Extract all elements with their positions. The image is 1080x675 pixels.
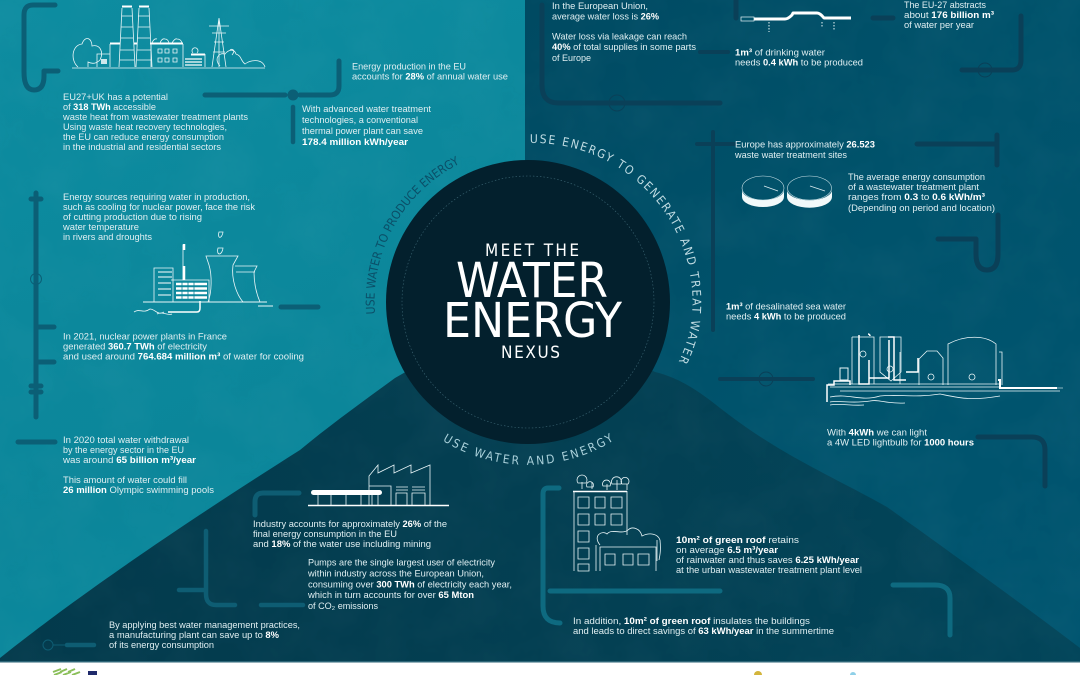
text: waste heat potential: EU27+UK has a potential — [63, 91, 168, 102]
text: green roof retention: on average 6.5 m³/year — [676, 544, 778, 555]
logo: right partners — [754, 671, 856, 675]
text: water loss: of Europe — [552, 52, 591, 63]
logo: left partner — [53, 669, 97, 675]
title — [443, 241, 623, 363]
text: treatment sites — [734, 138, 875, 160]
text: water withdrawal — [62, 434, 214, 495]
text: water withdrawal: This amount of water could fill — [63, 474, 187, 485]
text: thermal plant savings: 178.4 million kWh/year — [302, 136, 408, 147]
pipes: left panel — [18, 5, 339, 442]
text: thermal plant savings: technologies, a conventional — [302, 114, 418, 125]
text: energy production share: accounts for 28% of annual water use — [352, 70, 508, 82]
text: green roof retention: 10m² of green roof retains — [676, 534, 799, 545]
text: water loss: In the European Union, — [552, 0, 648, 11]
icon: desalination plant — [827, 334, 1063, 405]
text: green roof insulation: In addition, 10m² of green roof insulates the buildings — [573, 615, 810, 626]
curved label: use water and energy: USE WATER AND ENERGY — [444, 432, 612, 465]
text: thermal plant savings: With advanced water treatment — [302, 103, 431, 114]
text: drinking water — [735, 46, 863, 68]
text: treatment consumption: The average energy consumption — [848, 171, 985, 182]
icon: green roof building — [573, 475, 660, 571]
text: green roof insulation — [573, 615, 834, 636]
curved label: use water to produce energy: USE WATER TO PRODUCE ENERGY — [366, 156, 458, 314]
text: industry share: final energy consumption in the EU — [253, 528, 397, 539]
title: ENERGY — [443, 293, 623, 349]
text: nuclear in France: and used around 764.684 million m³ of water for cooling — [63, 350, 304, 362]
text: green roof retention — [676, 534, 862, 575]
text: LED comparison: With 4kWh we can light — [827, 426, 927, 438]
text: waste heat potential: in the industrial and residential sectors — [63, 141, 221, 152]
text: green roof retention: of rainwater and thus saves 6.25 kWh/year — [676, 554, 859, 565]
text: manufacturing savings: a manufacturing plant can save up to 8% — [109, 629, 280, 640]
text: water loss: 40% of total supplies in some parts — [552, 41, 696, 52]
text: pumps: consuming over 300 TWh of electricity each year, — [308, 578, 512, 590]
text: cooling risk: water temperature — [62, 221, 139, 232]
text: green roof retention: at the urban wastewater treatment plant level — [676, 564, 862, 575]
text: green roof insulation: and leads to direct savings of 63 kWh/year in the summertime — [573, 625, 834, 636]
text: drinking water: 1m³ of drinking water — [735, 46, 825, 58]
text: water withdrawal: was around 65 billion m³/year — [62, 454, 196, 465]
text: water loss — [552, 0, 696, 63]
text: thermal plant savings: thermal power plant can save — [302, 125, 423, 136]
text: industry share — [253, 518, 447, 549]
text: waste heat potential: Using waste heat recovery technologies, — [63, 121, 227, 132]
text: treatment consumption: ranges from 0.3 to 0.6 kWh/m³ — [848, 191, 985, 202]
text: pumps: of CO₂ emissions — [308, 600, 378, 611]
text: manufacturing savings — [109, 619, 300, 650]
text: pumps: within industry across the European Union, — [307, 568, 484, 578]
icon: water pipeline — [741, 13, 851, 32]
icon: factory — [308, 465, 449, 506]
text: LED comparison — [827, 426, 974, 448]
text: desalinated water: needs 4 kWh to be produced — [726, 310, 846, 322]
text: waste heat potential: of 318 TWh accessible — [63, 101, 156, 112]
text: industry share: and 18% of the water use including mining — [253, 538, 431, 549]
text: nuclear in France: generated 360.7 TWh of electricity — [63, 340, 207, 352]
text: treatment consumption: (Depending on period and location) — [848, 202, 995, 213]
text: industry share: Industry accounts for approximately 26% of the — [253, 518, 447, 529]
pipes: right panel — [542, 0, 1045, 486]
text: water withdrawal: In 2020 total water withdrawal — [63, 434, 189, 445]
curved label: use energy to generate and treat water: USE ENERGY TO GENERATE AND TREAT WATER — [530, 134, 702, 364]
title: MEET THE — [485, 241, 579, 261]
text: water withdrawal: 26 million Olympic swimming pools — [63, 484, 214, 495]
title: WATER — [456, 253, 608, 309]
pipes: green roof — [543, 488, 950, 635]
text: energy production share — [352, 60, 508, 82]
icon: power plant — [72, 6, 265, 68]
text: treatment consumption: of a wastewater treatment plant — [848, 181, 979, 192]
text: manufacturing savings: By applying best water management practices, — [109, 619, 300, 630]
title: NEXUS — [501, 343, 560, 363]
text: pumps — [307, 556, 512, 611]
text: water loss: Water loss via leakage can reach — [552, 30, 687, 42]
text: water loss: average water loss is 26% — [552, 10, 660, 22]
text: cooling risk: Energy sources requiring water in production, — [63, 191, 250, 202]
footer strip — [0, 661, 1080, 675]
text: waste heat potential: waste heat from wastewater treatment plants — [62, 111, 248, 122]
text: pumps: Pumps are the single largest user of electricity — [308, 556, 495, 568]
pipes: bottom panel — [43, 493, 303, 650]
text: energy production share: Energy production in the EU — [352, 60, 466, 72]
text: LED comparison: a 4W LED lightbulb for 1000 hours — [827, 436, 974, 448]
background: bottom panel use water and energy — [0, 302, 1080, 662]
background: right panel use energy — [525, 0, 1080, 662]
text: manufacturing savings: of its energy consumption — [109, 639, 214, 650]
text: waste heat potential: the EU can reduce energy consumption — [63, 131, 224, 142]
text: water abstraction — [904, 0, 994, 30]
central circle — [386, 160, 670, 444]
icon: treatment basins — [742, 176, 832, 208]
text: thermal plant savings — [302, 103, 431, 147]
text: treatment sites: Europe has approximately 26.523 — [735, 138, 875, 150]
text: cooling risk: of cutting production due to rising — [63, 211, 202, 222]
text: desalinated water: 1m³ of desalinated sea water — [726, 300, 846, 312]
text: cooling risk — [62, 191, 255, 242]
text: water abstraction: of water per year — [904, 19, 974, 30]
text: nuclear in France: In 2021, nuclear power plants in France — [63, 330, 227, 342]
icon: nuclear plant — [134, 232, 273, 314]
text: water abstraction: about 176 billion m³ — [904, 9, 994, 20]
text: pumps: which in turn accounts for over 65 Mton — [307, 589, 474, 600]
text: cooling risk: such as cooling for nuclear power, face the risk — [63, 201, 255, 212]
text: treatment sites: waste water treatment sites — [734, 149, 847, 160]
text: waste heat potential — [62, 91, 248, 152]
text: drinking water: needs 0.4 kWh to be produced — [735, 56, 863, 68]
text: treatment consumption — [848, 171, 995, 213]
text: nuclear in France — [63, 330, 304, 362]
text: desalinated water — [726, 300, 846, 322]
text: water withdrawal: by the energy sector in the EU — [63, 444, 184, 455]
text: cooling risk: in rivers and droughts — [63, 231, 152, 242]
